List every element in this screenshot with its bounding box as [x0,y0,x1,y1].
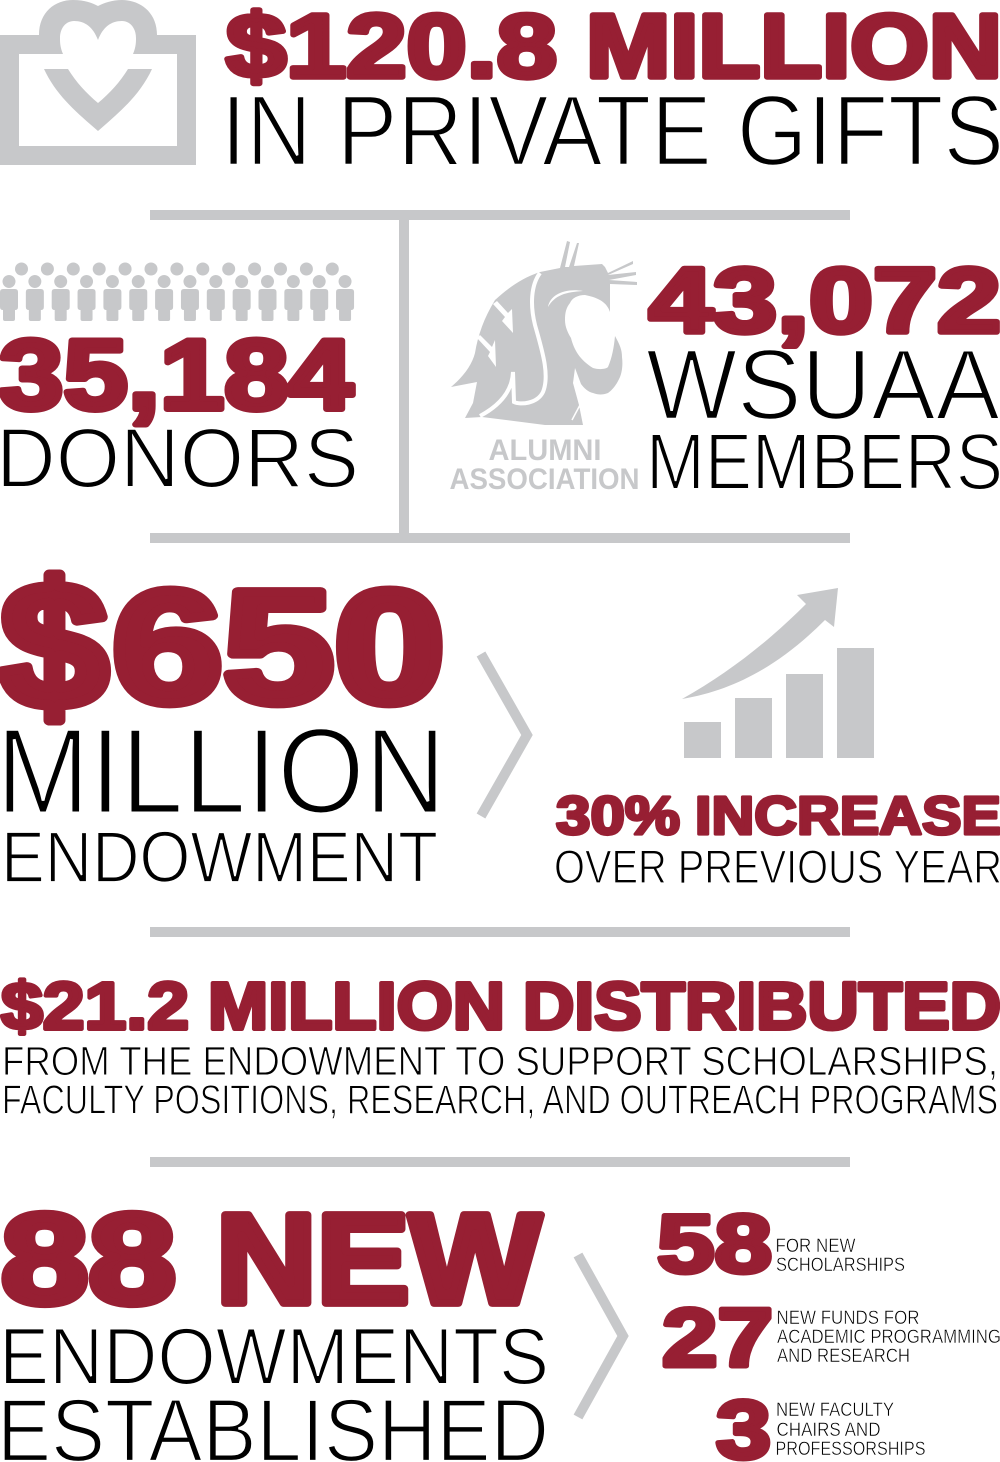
stat: distributed from endowment: DISTRIBUTED [523,969,1000,1044]
breakdown: 27 academic funds: 27 [662,1291,773,1384]
icon: rising bar chart with arrow [682,588,874,758]
stat: 30 percent increase: 30% [556,787,680,846]
stat: 30 percent increase [554,787,1000,893]
breakdown: 3 faculty chairs: CHAIRS AND [776,1419,880,1441]
logo text: alumni association: ASSOCIATION [450,463,640,496]
breakdown: 27 academic funds [662,1291,1000,1384]
stat: donors: DONORS [0,411,359,505]
breakdown: 27 academic funds: NEW FUNDS FOR [776,1307,920,1329]
stat: distributed from endowment: MILLION [208,969,505,1044]
divider: middle rule [150,927,850,937]
stat: distributed from endowment: $21.2 [1,969,189,1044]
divider: vertical rule [399,220,409,533]
breakdown: 27 academic funds: AND RESEARCH [777,1345,910,1367]
stat: new endowments: 88 [1,1188,176,1331]
icon: gift box with heart [0,0,196,165]
logo text: alumni association: ALUMNI [488,434,602,467]
stat: endowment: ENDOWMENT [1,818,438,898]
stat: 30 percent increase: INCREASE [695,787,1000,846]
logo: cougar head [451,241,637,425]
breakdown: 58 scholarships: SCHOLARSHIPS [776,1254,905,1276]
stat: endowment: MILLION [0,703,446,839]
stat: new endowments: ENDOWMENTS [0,1312,549,1402]
stat: distributed from endowment [1,969,1000,1122]
breakdown: 3 faculty chairs [716,1383,926,1462]
arrow: chevron [578,1255,623,1417]
breakdown: 58 scholarships: 58 [657,1197,772,1290]
breakdown: 58 scholarships: FOR NEW [776,1235,856,1257]
stat: endowment: $ [0,546,108,745]
breakdown: 58 scholarships [657,1197,905,1290]
stat: endowment [0,546,446,898]
stat: donors: 35,184 [0,319,353,430]
icon: crowd of people [0,262,354,321]
breakdown: 3 faculty chairs: PROFESSORSHIPS [776,1438,926,1460]
breakdown: 3 faculty chairs: NEW FACULTY [776,1399,894,1421]
stat: endowment: 650 [112,557,445,736]
divider: lower middle rule [150,1157,850,1167]
divider: top rule [150,210,850,220]
stat: new endowments [0,1188,549,1462]
stat: donors [0,319,359,505]
divider: lower rule [150,533,850,543]
stat: new endowments: NEW [216,1188,541,1331]
logo text: alumni association [450,434,640,496]
stat: WSUAA members [646,250,1000,506]
stat: WSUAA members: 43,072 [649,250,1000,352]
arrow: chevron [481,654,527,816]
heading: private gifts [221,0,1000,187]
